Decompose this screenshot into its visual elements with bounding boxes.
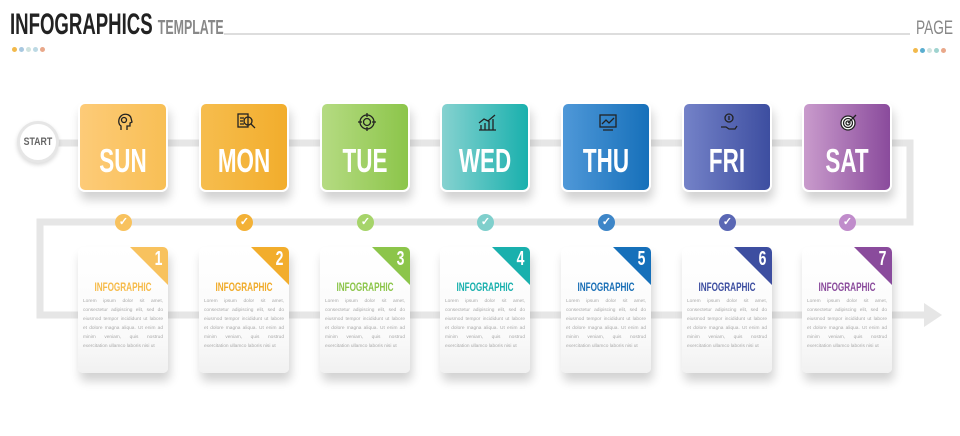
- card 1: [78, 247, 168, 373]
- card 5: INFOGRAPHIC: [577, 280, 635, 294]
- card 7: [802, 247, 892, 373]
- card 2: INFOGRAPHIC: [215, 280, 273, 294]
- checks: ✓: [602, 216, 611, 228]
- day: FRI: FRI: [709, 142, 745, 179]
- card 6: INFOGRAPHIC: [698, 280, 756, 294]
- card 7: INFOGRAPHIC: [818, 280, 876, 294]
- card 3: INFOGRAPHIC: [336, 280, 394, 294]
- day: WED: WED: [459, 142, 511, 179]
- card 7: 7: [879, 248, 886, 270]
- start circle: START: [24, 136, 52, 148]
- card 6: Lorem ipsum dolor sit amet, consectetur adipiscing elit, sed do eiusmod tempor incididunt ut labore et dolore magna aliqua. Ut enim ad minim veniam, quis nostrud exercitation ullamco laboris nisi ut: [687, 299, 767, 349]
- header line: [224, 33, 910, 35]
- checks: ✓: [723, 216, 732, 228]
- checks: ✓: [481, 216, 490, 228]
- card 2: 2: [276, 248, 283, 270]
- day: SAT: [802, 102, 892, 192]
- dots left: [12, 47, 45, 52]
- page label: PAGE: [916, 18, 953, 39]
- card 2: [199, 247, 289, 373]
- card 4: INFOGRAPHIC: [456, 280, 514, 294]
- day: MON: MON: [218, 142, 270, 179]
- title: INFOGRAPHICS TEMPLATE: [10, 8, 224, 41]
- day: FRI: [682, 102, 772, 192]
- day: TUE: TUE: [343, 142, 387, 179]
- card 4: Lorem ipsum dolor sit amet, consectetur adipiscing elit, sed do eiusmod tempor incididunt ut labore et dolore magna aliqua. Ut enim ad minim veniam, quis nostrud exercitation ullamco laboris nisi ut: [445, 299, 525, 349]
- card 6: [682, 247, 772, 373]
- card 2: Lorem ipsum dolor sit amet, consectetur adipiscing elit, sed do eiusmod tempor incididunt ut labore et dolore magna aliqua. Ut enim ad minim veniam, quis nostrud exercitation ullamco laboris nisi ut: [204, 299, 284, 349]
- checks: ✓: [240, 216, 249, 228]
- card 6: 6: [759, 248, 766, 270]
- card 3: [320, 247, 410, 373]
- card 5: Lorem ipsum dolor sit amet, consectetur adipiscing elit, sed do eiusmod tempor incididunt ut labore et dolore magna aliqua. Ut enim ad minim veniam, quis nostrud exercitation ullamco laboris nisi ut: [566, 299, 646, 349]
- card 4: [440, 247, 530, 373]
- card 4: 4: [517, 248, 524, 270]
- dots right: [913, 48, 946, 53]
- day: SUN: [78, 102, 168, 192]
- card 5: [561, 247, 651, 373]
- start circle: [17, 121, 59, 163]
- card 1: INFOGRAPHIC: [94, 280, 152, 294]
- day: SUN: SUN: [99, 142, 147, 179]
- day: SAT: SAT: [825, 142, 869, 179]
- card 3: 3: [397, 248, 404, 270]
- day: THU: [561, 102, 651, 192]
- card 5: 5: [638, 248, 645, 270]
- checks: [115, 214, 856, 231]
- card 1: Lorem ipsum dolor sit amet, consectetur adipiscing elit, sed do eiusmod tempor incididunt ut labore et dolore magna aliqua. Ut enim ad minim veniam, quis nostrud exercitation ullamco laboris nisi ut: [83, 299, 163, 349]
- day: WED: [440, 102, 530, 192]
- day: THU: THU: [583, 142, 629, 179]
- card 3: Lorem ipsum dolor sit amet, consectetur adipiscing elit, sed do eiusmod tempor incididunt ut labore et dolore magna aliqua. Ut enim ad minim veniam, quis nostrud exercitation ullamco laboris nisi ut: [325, 299, 405, 349]
- checks: ✓: [361, 216, 370, 228]
- card 1: 1: [155, 248, 162, 270]
- day: MON: [199, 102, 289, 192]
- checks: ✓: [843, 216, 852, 228]
- day: TUE: [320, 102, 410, 192]
- card 7: Lorem ipsum dolor sit amet, consectetur adipiscing elit, sed do eiusmod tempor incididunt ut labore et dolore magna aliqua. Ut enim ad minim veniam, quis nostrud exercitation ullamco laboris nisi ut: [807, 299, 887, 349]
- checks: ✓: [119, 216, 128, 228]
